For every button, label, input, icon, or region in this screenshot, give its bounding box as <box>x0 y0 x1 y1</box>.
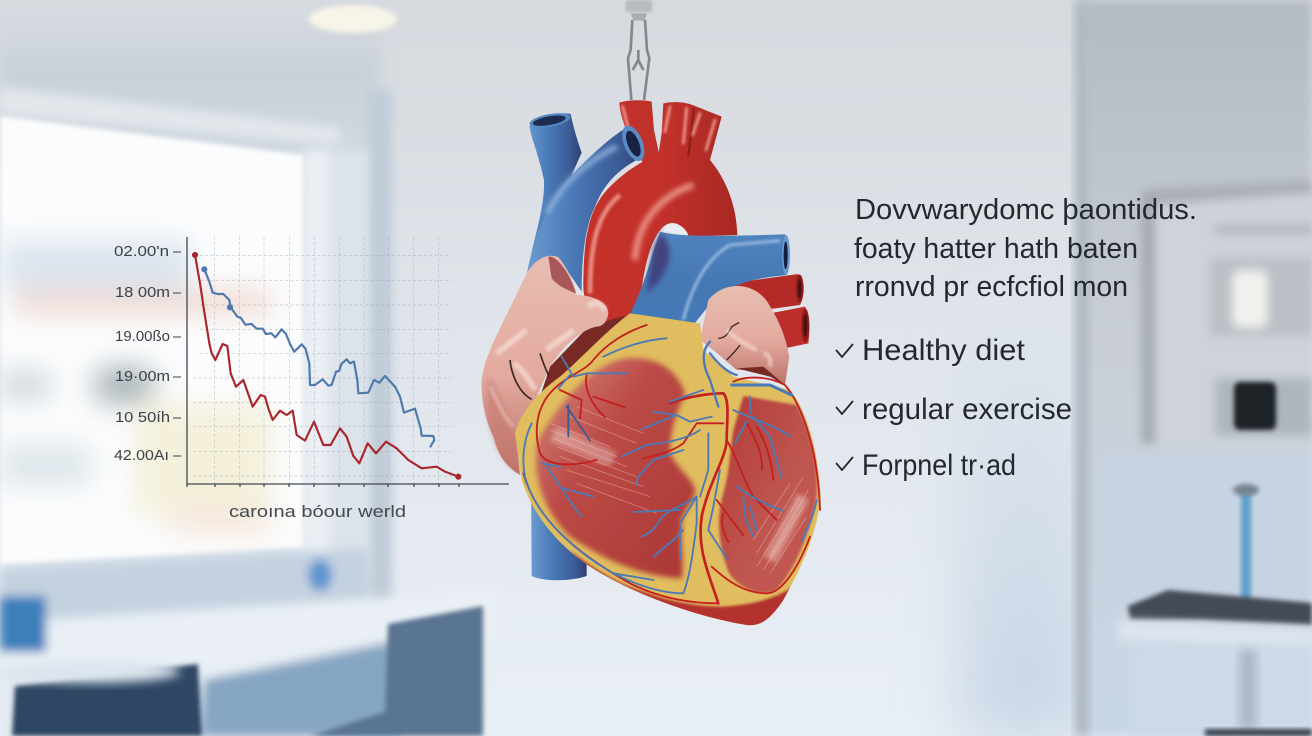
anterior wall muscle <box>536 358 695 578</box>
pulmonary artery tube (left) <box>527 123 649 292</box>
pulmonary vein stubs <box>730 274 809 350</box>
y axis labels: 10 50íh <box>115 410 170 426</box>
y axis labels <box>114 244 182 464</box>
muscle fibres <box>550 407 808 573</box>
bluish lower wall tone <box>960 300 1090 736</box>
y axis labels: – <box>173 410 182 426</box>
y axis labels: – <box>173 329 182 345</box>
x axis label: caroına bóour werld <box>229 502 406 521</box>
chart axes <box>187 237 509 487</box>
checklist <box>836 334 1072 482</box>
check item: regular exercise: regular exercise <box>862 393 1072 426</box>
red data line <box>193 253 460 479</box>
lower vena cava stub <box>531 477 587 580</box>
right ventricle muscle <box>719 396 817 593</box>
right atrium (pink) <box>700 286 789 385</box>
left room section <box>0 0 392 736</box>
window <box>0 116 303 565</box>
heart illustration <box>482 0 821 630</box>
blue data line <box>202 267 434 447</box>
bottom dark band <box>570 550 793 630</box>
y axis labels: 02.00'n <box>114 244 169 260</box>
aorta arch and branches <box>583 100 737 328</box>
y axis labels: – <box>173 448 182 464</box>
y axis labels: 19.00ßo <box>115 329 170 345</box>
paragraph: Dovvwarydomc þaontidus. <box>855 194 1197 226</box>
coronary veins (blue) <box>523 338 817 593</box>
chart grid <box>193 237 452 483</box>
left atrium (pink) <box>482 256 608 475</box>
pulmonary artery trunk <box>627 232 790 333</box>
y axis labels: 19·00m <box>115 369 170 385</box>
y axis labels: 42.00Aı <box>114 448 169 464</box>
check item: healthy diet: Healthy diet <box>862 334 1026 367</box>
paragraph <box>854 194 1197 303</box>
paragraph: foaty hatter hath baten <box>854 233 1138 265</box>
y axis labels: – <box>173 244 182 260</box>
sill, desk and chairs <box>0 548 500 736</box>
superior vena cava <box>527 111 582 275</box>
prevention text block <box>836 194 1197 482</box>
heart ventricles <box>515 313 821 630</box>
check item: third item: Forpnel tr·ad <box>862 449 1016 482</box>
ceiling light <box>309 5 397 33</box>
chart: downward trend lines <box>114 237 509 521</box>
y axis labels: – <box>173 285 182 301</box>
suspension clip <box>626 0 652 100</box>
right wall and shelving <box>1075 0 1312 736</box>
coronary arteries (red) <box>523 325 820 603</box>
dark gap behind atrium <box>540 315 627 397</box>
y axis labels: – <box>173 369 182 385</box>
y axis labels: 18 00m <box>115 285 170 301</box>
paragraph: rronvd pr ecfcfiol mon <box>855 271 1128 303</box>
